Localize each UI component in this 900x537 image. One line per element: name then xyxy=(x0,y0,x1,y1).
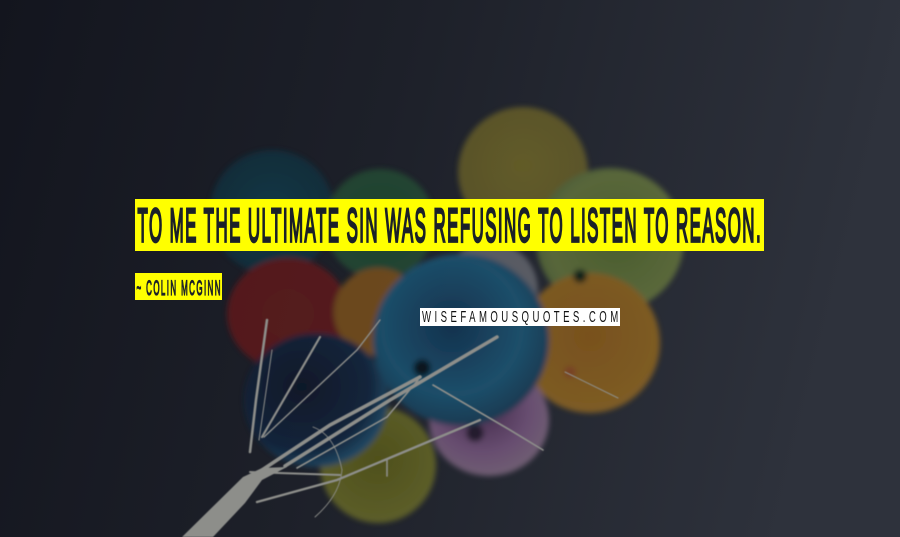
quote highlight band xyxy=(135,199,764,251)
watermark box xyxy=(420,308,620,326)
watermark text: WISEFAMOUSQUOTES.COM xyxy=(422,307,618,326)
author highlight band xyxy=(135,273,222,300)
balloons xyxy=(210,107,684,523)
balloon strings xyxy=(182,320,618,537)
author text: ~ COLIN MCGINN xyxy=(136,278,220,300)
quote text: TO ME THE ULTIMATE SIN WAS REFUSING TO LISTEN TO REASON. xyxy=(138,200,761,252)
